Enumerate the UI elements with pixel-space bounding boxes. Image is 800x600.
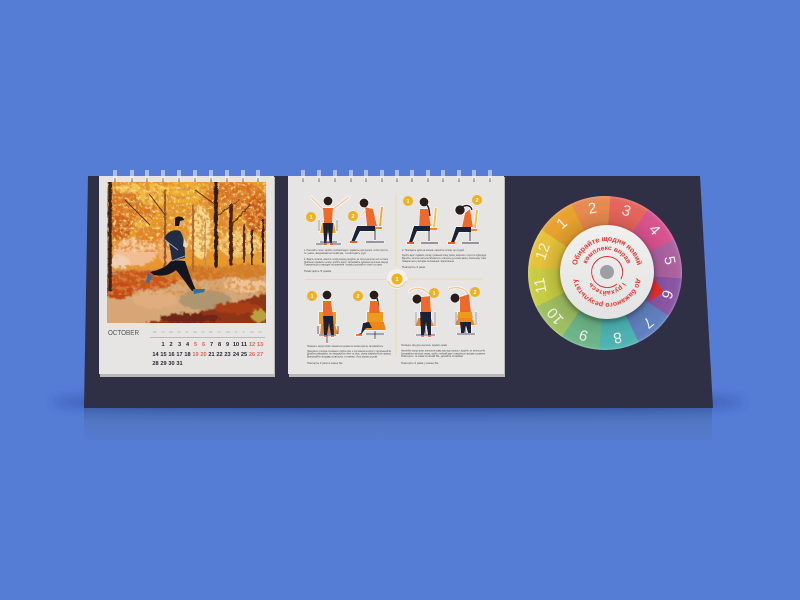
date grid: 25	[241, 352, 247, 358]
date grid: 23	[224, 352, 231, 358]
centre ring	[592, 257, 623, 288]
instructions: їх униз, видихаючи повітря, і повторіть рух	[303, 251, 367, 255]
step badge 2: 2	[351, 214, 355, 220]
instructions: 2. Зведіть лопатки, нахиліть голову вперед, відчуйте, як тягнуться м'язи шиї та спини	[304, 257, 388, 261]
instructions: Дихайте рівномірно, не напружуйте плечі та шию, спина повинна бути прямою	[307, 352, 391, 356]
instructions: 2. Покладіть руки на коліна, нахиліть голову до грудей	[402, 248, 464, 252]
instructions: Поверніться у вихідне положення, зробіть вдих, а тоді поверніть корпус у протилежний бік	[307, 349, 392, 353]
figure step 1	[409, 288, 435, 336]
instructions: Повторіть 5 разів.	[304, 269, 332, 273]
desk calendar board	[84, 176, 713, 408]
figure step 1	[311, 196, 349, 244]
weekday row: We	[226, 330, 231, 334]
exercise 2: neck bend	[402, 195, 486, 269]
spiral binding	[302, 170, 491, 182]
instructions: Повільно підніміть голову, зробіть вдих і затримайте дихання на кілька секунд	[304, 260, 388, 264]
instructions: Повторіть 3 рази в кожен бік.	[307, 361, 343, 365]
date grid: 15	[160, 352, 167, 358]
instructions: Повторіть 5 разів у кожен бік.	[401, 361, 439, 365]
weekday row: Fr	[186, 330, 188, 334]
spiral binding	[114, 170, 259, 182]
wheel numbers: 2	[587, 200, 598, 218]
date grid: 2	[169, 342, 173, 348]
wheel numbers: 4	[645, 221, 664, 239]
ground shadow	[52, 395, 744, 444]
instructions	[402, 248, 486, 269]
instructions: Відчуйте, як м'язи шиї розслабляються, повторіть рух кілька разів у повільному темпі	[402, 256, 486, 260]
date grid: 14	[152, 352, 159, 358]
date grid: 3	[178, 342, 181, 348]
date grid: 11	[241, 342, 247, 348]
instructions: Нахиляйте корпус вліво, витягуючи праву руку над головою, і відчуйте, як тягнеться бік	[401, 348, 486, 352]
date grid: 17	[176, 352, 183, 358]
painting: autumn runner	[107, 182, 266, 323]
date grid: 6	[202, 342, 205, 348]
exercise page	[288, 170, 505, 377]
weekday row: We	[169, 330, 174, 334]
wheel numbers: 10	[544, 304, 567, 328]
date grid: 5	[194, 342, 197, 348]
date grid: 22	[216, 352, 223, 358]
weekday row: Mo	[153, 330, 157, 334]
date grid: 27	[257, 352, 263, 358]
exercise 3: torso twist	[307, 290, 392, 365]
date grid: 9	[226, 342, 229, 348]
date grid: 13	[257, 342, 263, 348]
center badge: 1	[395, 277, 399, 283]
wheel numbers: 6	[658, 288, 676, 301]
weekday row: Su	[201, 330, 205, 334]
step badge 1: 1	[406, 199, 410, 205]
top arc text: Обирайте щодня новий	[572, 237, 642, 265]
instructions: Поверніться у вихідне положення і знову розслабте плечі та шию	[304, 262, 382, 266]
instructions: Поверніть корпус вліво і візьміться руками за спинку крісла, затримайтесь	[307, 344, 383, 348]
instructions	[401, 343, 486, 365]
date grid	[152, 342, 263, 367]
date grid: 30	[168, 361, 175, 367]
exercise 4: side bend	[401, 287, 486, 365]
date grid: 16	[168, 352, 175, 358]
instructions: Покладіть ліву руку на коліно, підніміть праву	[401, 343, 447, 347]
step badge 1: 1	[310, 294, 314, 300]
figure step 2	[350, 198, 384, 243]
instructions: Затримайтеся на кілька секунд, зробіть глибокий вдих і поверніться у вихідне положення	[401, 352, 485, 356]
center badge	[387, 269, 407, 289]
instructions: Зробіть вдих і підніміть голову, тримаючи спину прямо, видихніть і опустіть підборіддя	[402, 253, 486, 257]
wheel numbers: 5	[660, 255, 678, 266]
weekday row: Su	[258, 330, 262, 334]
wheel numbers: 8	[612, 328, 623, 346]
step badge 1: 1	[309, 215, 313, 221]
weekday row: Mo	[209, 330, 213, 334]
date grid: 24	[233, 352, 240, 358]
leaf texture	[107, 182, 266, 295]
figure step 1	[318, 290, 338, 343]
weekday row: Th	[177, 330, 181, 334]
wheel numbers: 1	[553, 214, 571, 233]
step badge 2: 2	[356, 294, 360, 300]
date grid: 12	[249, 342, 255, 348]
instructions: Повторіть те саме в інший бік, дихайте спокійно	[401, 354, 463, 358]
instructions	[307, 344, 392, 365]
weekday row: Sa	[193, 330, 197, 334]
figure step 2	[448, 205, 479, 243]
date grid: 8	[218, 342, 221, 348]
date grid: 7	[210, 342, 213, 348]
runner	[146, 217, 205, 294]
weekday row: Sa	[250, 330, 254, 334]
top arc text: комплекс вправ	[584, 246, 630, 264]
bottom arc text: і рухайтесь	[590, 282, 626, 296]
weekday row: Tu	[161, 330, 165, 334]
calendar page: October	[99, 170, 275, 377]
weekday row: Tu	[217, 330, 221, 334]
weekday row: Fr	[243, 330, 245, 334]
red pointer	[650, 277, 663, 301]
instructions: Поверніться у вихідне положення і відпочиньте	[402, 259, 454, 263]
instructions: 1. Розслабте плечі, зробіть глибокий вдих і підніміть руки догори, потім опустіть	[304, 248, 388, 252]
centre pin	[600, 265, 614, 279]
instructions: Повторіть 4 рази.	[402, 265, 426, 269]
instructions: Виконуйте вправу повільно і плавно, без різких рухів	[307, 354, 378, 358]
instructions	[303, 248, 388, 273]
centre disc	[556, 224, 657, 324]
date grid: 29	[160, 361, 167, 367]
figure step 2	[356, 290, 386, 339]
wheel numbers	[531, 200, 678, 346]
date grid: 21	[208, 352, 215, 358]
date grid: 1	[161, 342, 165, 348]
wheel numbers: 3	[620, 202, 633, 220]
exercise 1: arms raised	[303, 196, 388, 273]
weekday row	[150, 330, 265, 338]
wheel numbers: 11	[531, 276, 551, 295]
month label: OCTOBER	[108, 328, 139, 337]
date grid: 19	[192, 352, 199, 358]
bottom arc text: до бажаного результату	[573, 278, 640, 307]
colour wheel	[528, 196, 682, 350]
figure step 1	[407, 198, 438, 243]
date grid: 31	[176, 361, 183, 367]
figure step 2	[449, 288, 476, 334]
tree trunks	[110, 180, 263, 290]
step badge 1: 1	[432, 291, 436, 297]
wheel segments	[552, 220, 658, 326]
date grid: 20	[200, 352, 207, 358]
wheel numbers: 12	[532, 241, 554, 262]
wheel numbers: 7	[639, 313, 657, 332]
date grid: 26	[249, 352, 255, 358]
date grid: 10	[233, 342, 239, 348]
date grid: 18	[184, 352, 191, 358]
step badge 2: 2	[475, 198, 479, 204]
wheel numbers: 9	[577, 326, 590, 344]
date grid: 4	[186, 342, 190, 348]
dividers	[305, 193, 483, 355]
date grid: 28	[152, 361, 159, 367]
weekday row: Th	[234, 330, 238, 334]
step badge 2: 2	[473, 290, 477, 296]
